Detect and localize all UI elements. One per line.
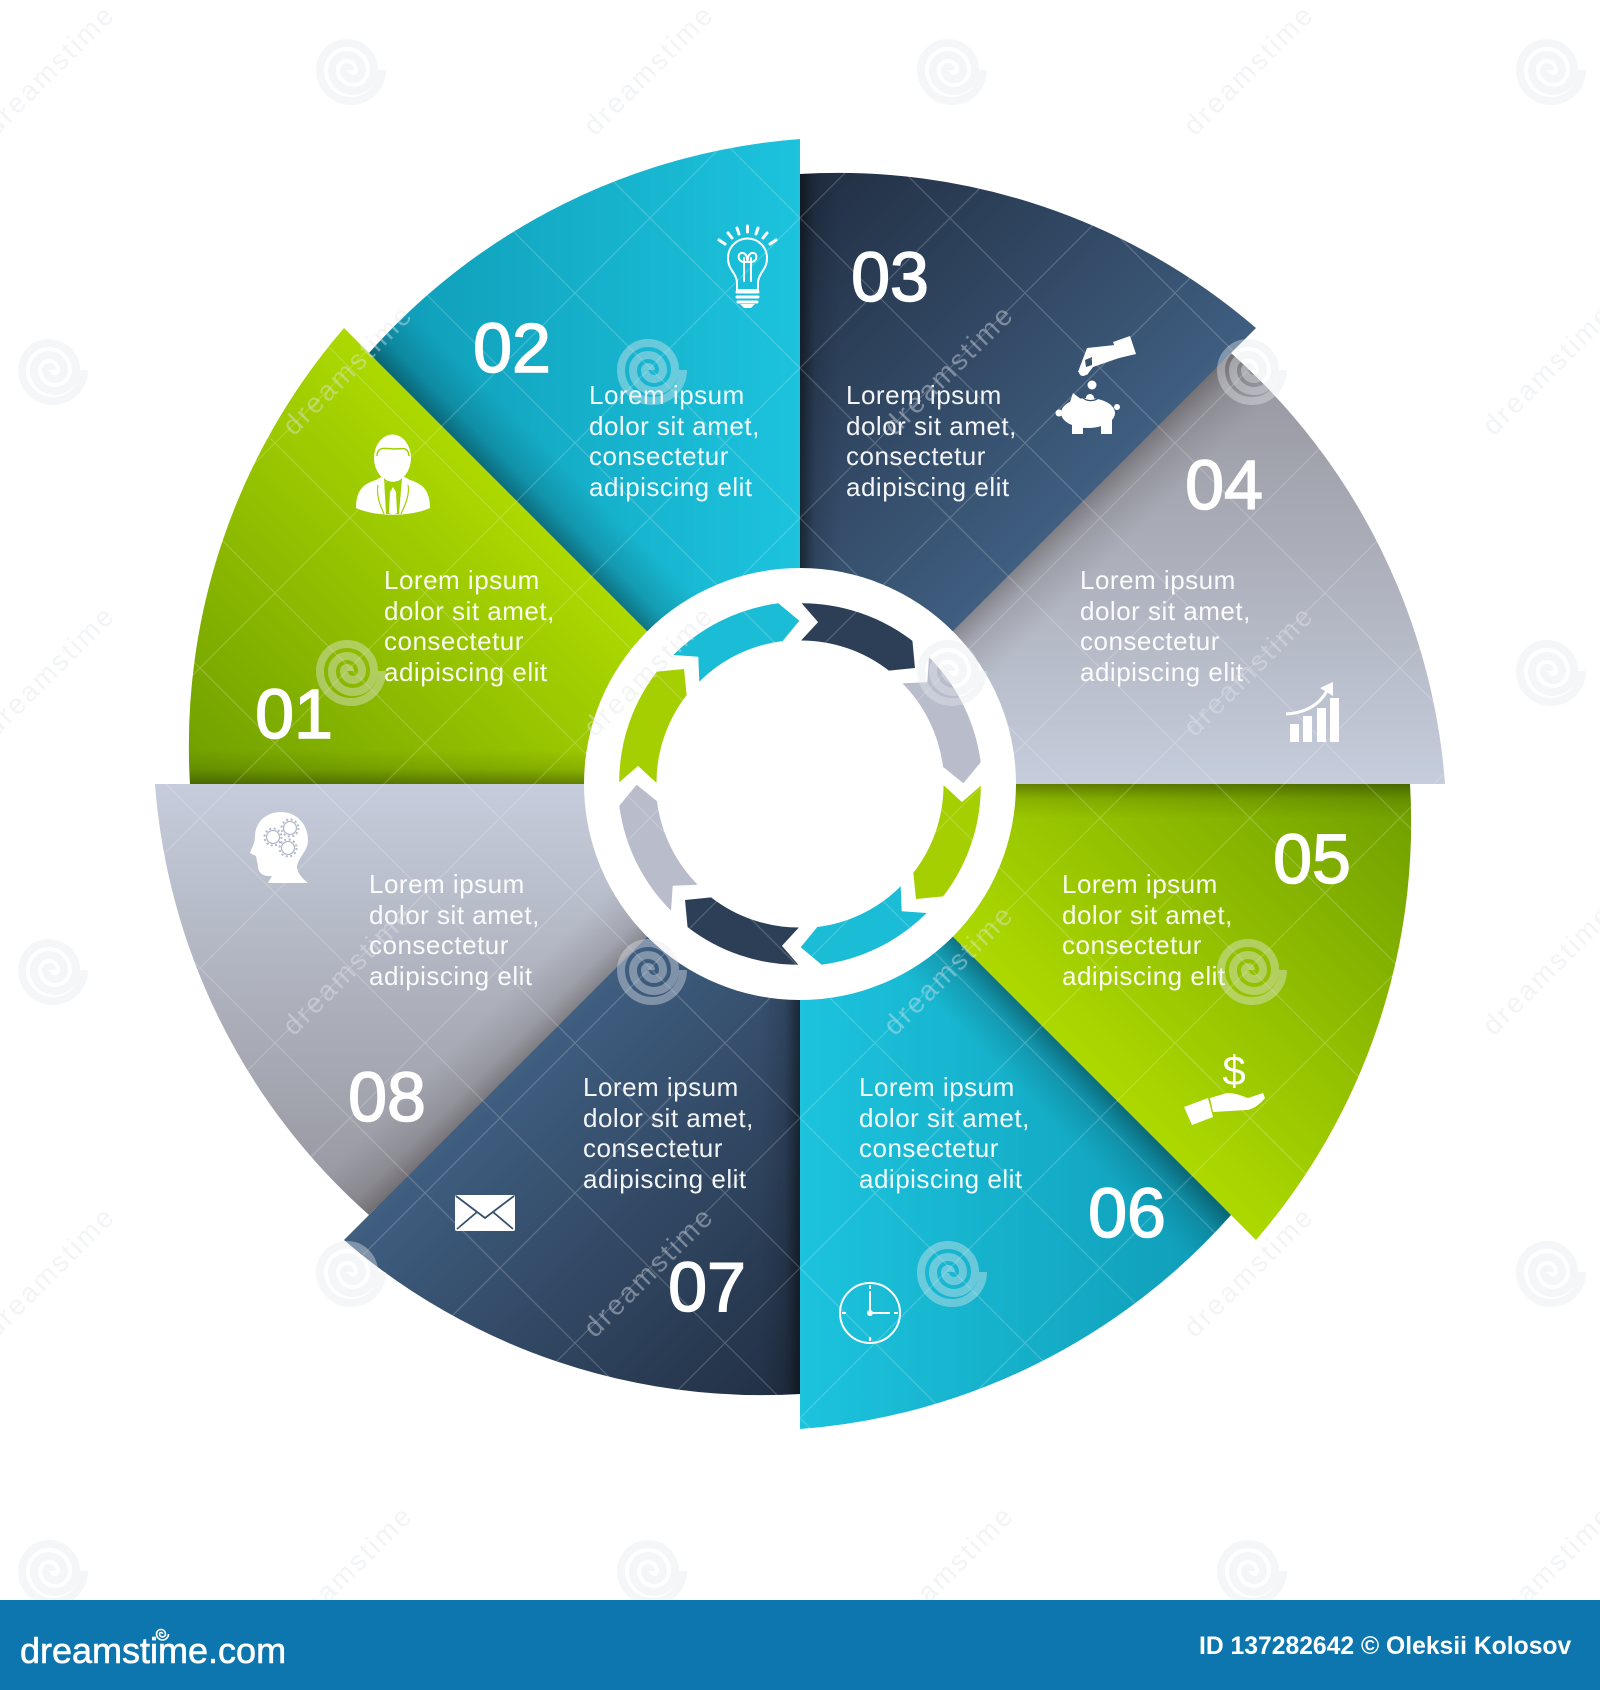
arrow: green 05 (873, 767, 1017, 911)
text 02: adipiscing elit (589, 472, 753, 502)
arrow: teal 06 (801, 886, 927, 965)
text 03: dolor sit amet, (846, 411, 1017, 441)
icon: clock (839, 1282, 901, 1344)
watermark overlay: dreamstime (1177, 1200, 1320, 1343)
text 06: consectetur (859, 1133, 999, 1163)
image id and author: ID 137282642 © Oleksii Kolosov (1199, 1633, 1571, 1660)
number 02: 02 (473, 309, 551, 387)
text 03: Lorem ipsum (846, 380, 1002, 410)
icon: businessman (356, 434, 430, 515)
icon: head with gears (250, 812, 308, 883)
text 05: adipiscing elit (1062, 961, 1226, 991)
text 04: dolor sit amet, (1080, 596, 1251, 626)
center ring with cycle arrows (584, 568, 1016, 1000)
icon: hand with dollar (1184, 1047, 1265, 1125)
icon: hand with dollar: $ (1222, 1047, 1246, 1094)
watermark overlay: dreamstime (877, 898, 1020, 1041)
arrow: grey 08 (619, 785, 698, 911)
panel: 01 green (188, 328, 648, 784)
icon: growth chart (1286, 682, 1339, 742)
panel: 05 green (952, 784, 1412, 1240)
watermark overlay: dreamstime (577, 1200, 720, 1343)
text 08: dolor sit amet, (369, 900, 540, 930)
text 05 (1062, 869, 1233, 991)
number 01: 01 (255, 675, 333, 753)
text 02: consectetur (589, 441, 729, 471)
watermark overlay: dreamstime (577, 599, 720, 742)
text 04: Lorem ipsum (1080, 565, 1236, 595)
watermark overlay: dreamstime (276, 898, 419, 1041)
panel: 04 grey (952, 353, 1445, 784)
text 05: Lorem ipsum (1062, 869, 1218, 899)
text 07 (583, 1072, 754, 1194)
panel: 07 navy (344, 937, 800, 1396)
text 01: consectetur (384, 626, 524, 656)
watermark overlay: dreamstime (1177, 599, 1320, 742)
text 03 (846, 380, 1017, 502)
footer bar (0, 1600, 1600, 1690)
text 07: adipiscing elit (583, 1164, 747, 1194)
number 08: 08 (348, 1058, 426, 1136)
arrow: grey 04 (902, 657, 981, 783)
text 08: consectetur (369, 930, 509, 960)
text 07: dolor sit amet, (583, 1103, 754, 1133)
arrow: navy 07 (673, 857, 817, 1001)
text 08 (369, 869, 540, 991)
text 04: consectetur (1080, 626, 1220, 656)
number 07: 07 (668, 1248, 746, 1326)
text 02: dolor sit amet, (589, 411, 760, 441)
text 06: Lorem ipsum (859, 1072, 1015, 1102)
text 02: Lorem ipsum (589, 380, 745, 410)
arrow: teal 02 (673, 603, 799, 682)
panel: 03 navy (800, 172, 1256, 631)
text 07: Lorem ipsum (583, 1072, 739, 1102)
icon: light bulb (717, 224, 778, 308)
arrow: navy 03 (783, 567, 927, 711)
number 05: 05 (1273, 820, 1351, 898)
text 04: adipiscing elit (1080, 657, 1244, 687)
text 01: Lorem ipsum (384, 565, 540, 595)
watermark overlay: dreamstime (877, 298, 1020, 441)
number 03: 03 (851, 238, 929, 316)
text 02 (589, 380, 760, 502)
panel: 08 grey (155, 784, 648, 1215)
text 04 (1080, 565, 1251, 687)
text 01: adipiscing elit (384, 657, 548, 687)
number 06: 06 (1088, 1174, 1166, 1252)
watermark overlay: dreamstime (577, 0, 720, 141)
number 04: 04 (1185, 446, 1263, 524)
text 06: dolor sit amet, (859, 1103, 1030, 1133)
text 05: consectetur (1062, 930, 1202, 960)
text 06 (859, 1072, 1030, 1194)
icon: envelope (455, 1195, 515, 1231)
panel: 06 teal (800, 936, 1231, 1429)
text 08: Lorem ipsum (369, 869, 525, 899)
logo text: dreamstime.com (20, 1630, 286, 1671)
text 07: consectetur (583, 1133, 723, 1163)
icon: piggy bank (1056, 336, 1136, 434)
watermark overlay: dreamstime (276, 298, 419, 441)
logo spiral icon (156, 1628, 170, 1641)
text 03: adipiscing elit (846, 472, 1010, 502)
text 05: dolor sit amet, (1062, 900, 1233, 930)
text 01 (384, 565, 555, 687)
arrow: green 01 (583, 657, 727, 801)
text 06: adipiscing elit (859, 1164, 1023, 1194)
text 08: adipiscing elit (369, 961, 533, 991)
text 01: dolor sit amet, (384, 596, 555, 626)
watermark overlay: dreamstime (1177, 0, 1320, 141)
panel: 02 teal (369, 139, 800, 632)
text 03: consectetur (846, 441, 986, 471)
